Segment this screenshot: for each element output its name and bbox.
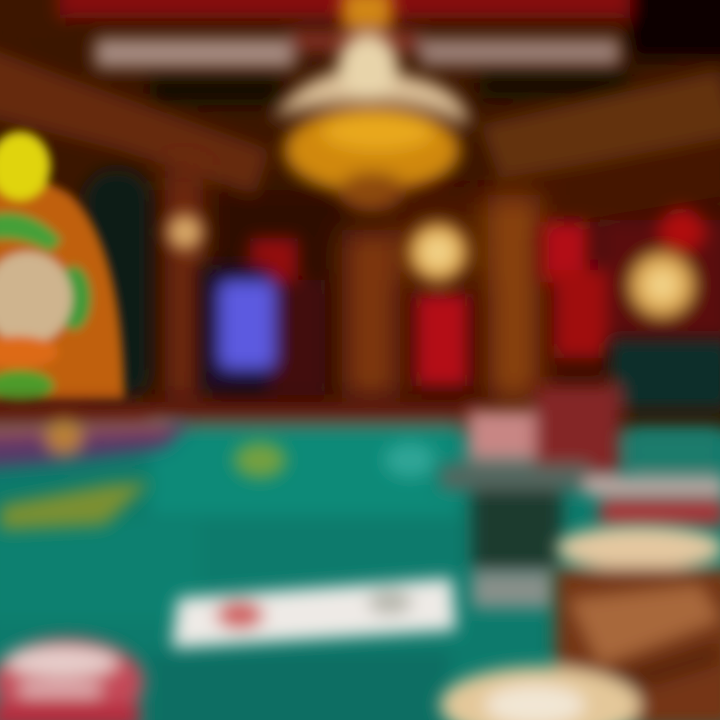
ceiling sign band [95, 30, 620, 68]
right chips and objects [440, 340, 720, 608]
red drapes and right lamp [542, 208, 720, 358]
felt table [0, 402, 720, 720]
chandelier [272, 0, 470, 212]
felt markings [0, 442, 436, 530]
ceiling [0, 0, 720, 240]
dark arch panel [84, 170, 150, 400]
lamps and screen [167, 214, 468, 395]
background wall [0, 0, 720, 450]
hand and plate [440, 526, 720, 720]
wheel arch [0, 132, 124, 402]
chip stack bottom left [0, 638, 144, 720]
wood columns [165, 165, 540, 405]
white card [172, 578, 456, 648]
table rim [0, 418, 190, 468]
